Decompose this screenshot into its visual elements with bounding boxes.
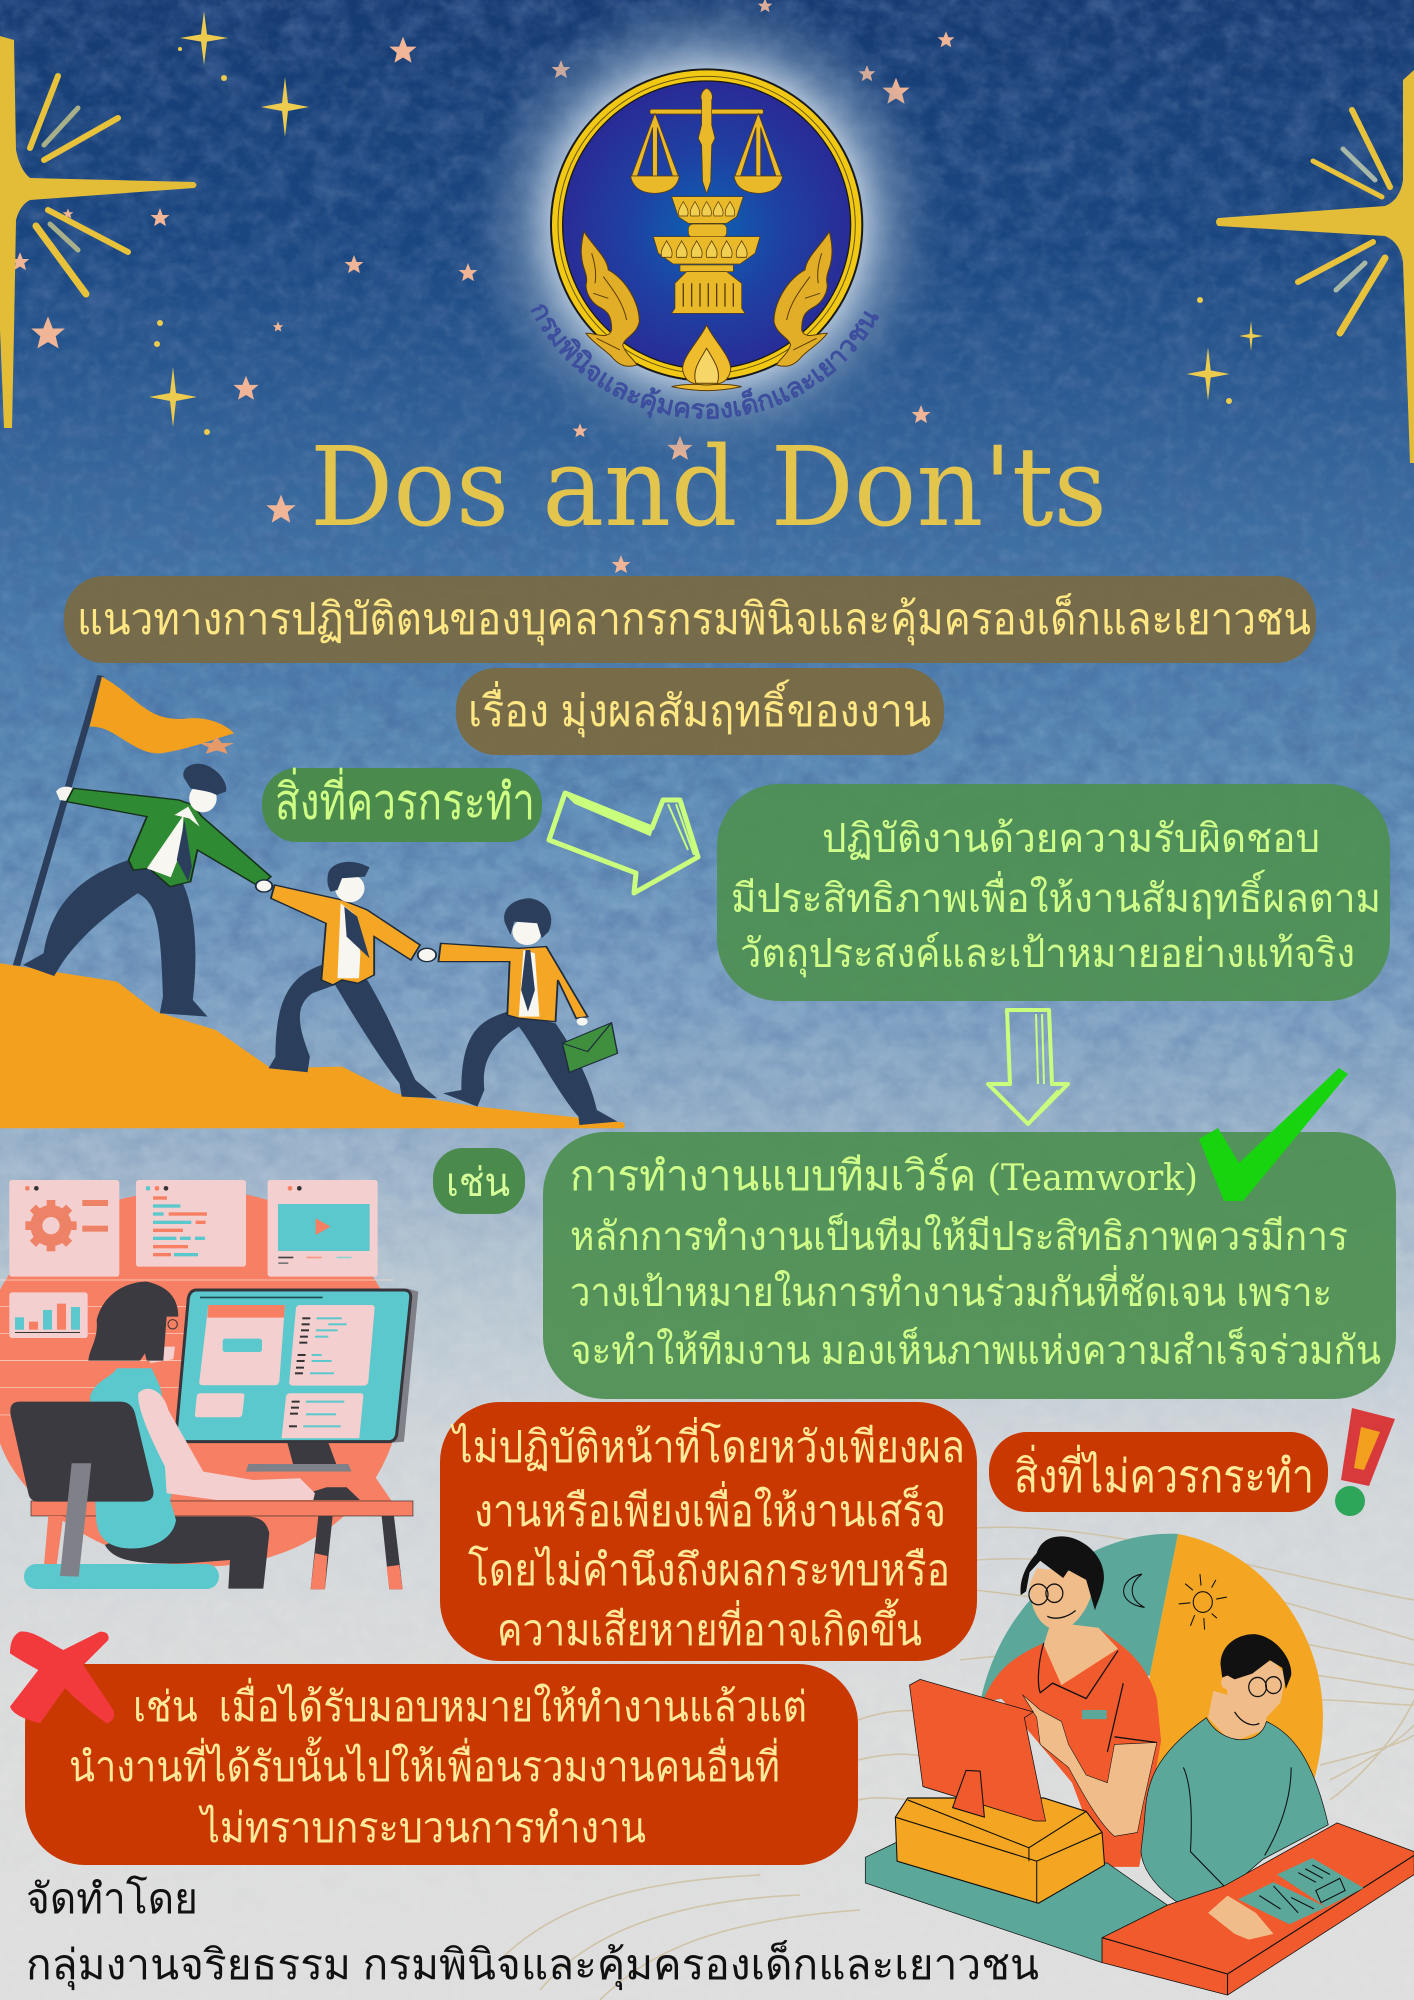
panel: example of what not to do <box>25 1664 858 1865</box>
naga right <box>774 232 832 366</box>
icon: check mark <box>1199 1068 1348 1201</box>
orange half circle <box>1143 1534 1323 1787</box>
scales <box>631 88 783 193</box>
panel: what not to do: ไม่ปฏิบัติหน้าที่โดยหวังเพียงผล <box>450 1416 965 1472</box>
heading pill: guideline <box>64 576 1316 663</box>
climber 1 <box>23 764 271 1017</box>
curved department name <box>530 308 883 419</box>
teal half circle <box>980 1534 1178 1702</box>
heading pill: guideline: แนวทางการปฏิบัติตนของบุคลากรกรมพินิจและคุ้มครองเด็กและเยาวชน <box>77 593 1311 646</box>
panel: what to do <box>717 784 1390 1001</box>
heading pill: subject: เรื่อง มุ่งผลสัมฤทธิ์ของงาน <box>468 679 931 738</box>
panel: example of what not to do: เช่น เมื่อได้รับมอบหมายให้ทำงานแล้วแต่ <box>133 1678 807 1730</box>
panel: teamwork example: หลักการทำงานเป็นทีมให้มีประสิทธิภาพควรมีการ <box>570 1212 1348 1259</box>
panel: example of what not to do: นำงานที่ได้รับนั้นไปให้เพื่อนรวมงานคนอื่นที่ <box>69 1736 780 1790</box>
panel: teamwork example: การทำงานแบบทีมเวิร์ค (Teamwork) <box>570 1152 1198 1199</box>
chair <box>10 1402 154 1502</box>
person at desk <box>105 1517 269 1589</box>
climber 2 <box>256 862 437 1098</box>
pill: things not to do <box>989 1432 1328 1512</box>
panel: teamwork example: วางเป้าหมายในการทำงานร่วมกันที่ชัดเจน เพราะ <box>570 1265 1332 1315</box>
decorative curved lines <box>500 1527 1414 2000</box>
logo emblem: กรมพินิจและคุ้มครองเด็กและเยาวชน <box>530 304 879 420</box>
gold sparkles <box>149 11 1263 435</box>
worker one <box>982 1536 1161 1867</box>
icon: exclamation <box>1335 1408 1395 1516</box>
panel: what to do: วัตถุประสงค์และเป้าหมายอย่างแท้จริง <box>740 931 1355 978</box>
desk <box>263 1472 392 1501</box>
monitor <box>393 1288 418 1443</box>
panel: what to do: ปฏิบัติงานด้วยความรับผิดชอบ <box>822 817 1320 861</box>
video panel <box>278 1204 370 1251</box>
pill: things to do <box>262 768 542 842</box>
icon: red cross <box>10 1632 114 1723</box>
naga left <box>581 232 639 366</box>
panel: teamwork example <box>543 1132 1396 1399</box>
illustration: two office workers <box>865 1534 1414 1995</box>
flag <box>90 677 234 753</box>
lotus bud <box>672 325 742 391</box>
panel: what not to do: งานหรือเพียงเพื่อให้งานเสร็จ <box>474 1480 946 1536</box>
base platform teal <box>865 1842 1167 1963</box>
title: Dos and Don'ts <box>310 423 1107 551</box>
salmon circle <box>0 1190 403 1567</box>
panel: what not to do <box>440 1402 977 1661</box>
arrow: right <box>549 793 698 893</box>
pill: things to do: สิ่งที่ควรกระทำ <box>275 768 535 830</box>
gear <box>25 1186 108 1251</box>
red desk <box>1102 1823 1414 1995</box>
stars <box>11 0 954 573</box>
panel: what not to do: ความเสียหายที่อาจเกิดขึ้น <box>497 1598 922 1655</box>
background texture <box>0 0 1414 1594</box>
illustration: team climbing <box>0 675 624 1128</box>
panel: what to do: มีประสิทธิภาพเพื่อให้งานสัมฤทธิ์ผลตาม <box>731 869 1381 921</box>
hill <box>0 963 624 1128</box>
footer: made by: จัดทำโดย <box>26 1874 198 1922</box>
worker two <box>1141 1634 1328 1915</box>
gold starburst right <box>1216 70 1414 463</box>
moon and sun <box>1124 1574 1144 1607</box>
climber 3 <box>418 898 617 1125</box>
logo glow <box>467 0 947 465</box>
monitor stand <box>287 1443 337 1465</box>
pill: for example: เช่น <box>446 1161 510 1205</box>
code lines <box>153 1186 207 1256</box>
bar chart <box>15 1307 80 1330</box>
monitor panels <box>195 1305 375 1438</box>
footer: organisation: กลุ่มงานจริยธรรม กรมพินิจและคุ้มครองเด็กและเยาวชน <box>26 1940 1039 1991</box>
flag pole <box>13 675 104 966</box>
stacked orange boxes <box>895 1798 1105 1903</box>
pill: for example <box>433 1148 525 1214</box>
logo emblem <box>530 68 879 420</box>
panel: example of what not to do: ไม่ทราบกระบวนการทำงาน <box>198 1804 646 1851</box>
gold starburst left <box>0 36 196 428</box>
heading pill: subject <box>456 668 944 755</box>
illustration: person at computer <box>0 1180 418 1589</box>
window panels <box>9 1180 378 1338</box>
pill: things not to do: สิ่งที่ไม่ควรกระทำ <box>1014 1444 1314 1502</box>
panel: what not to do: โดยไม่คำนึงถึงผลกระทบหรือ <box>468 1545 950 1595</box>
arrow: down <box>988 1010 1068 1124</box>
monitor <box>909 1679 1046 1821</box>
lotus pedestal <box>653 197 760 313</box>
